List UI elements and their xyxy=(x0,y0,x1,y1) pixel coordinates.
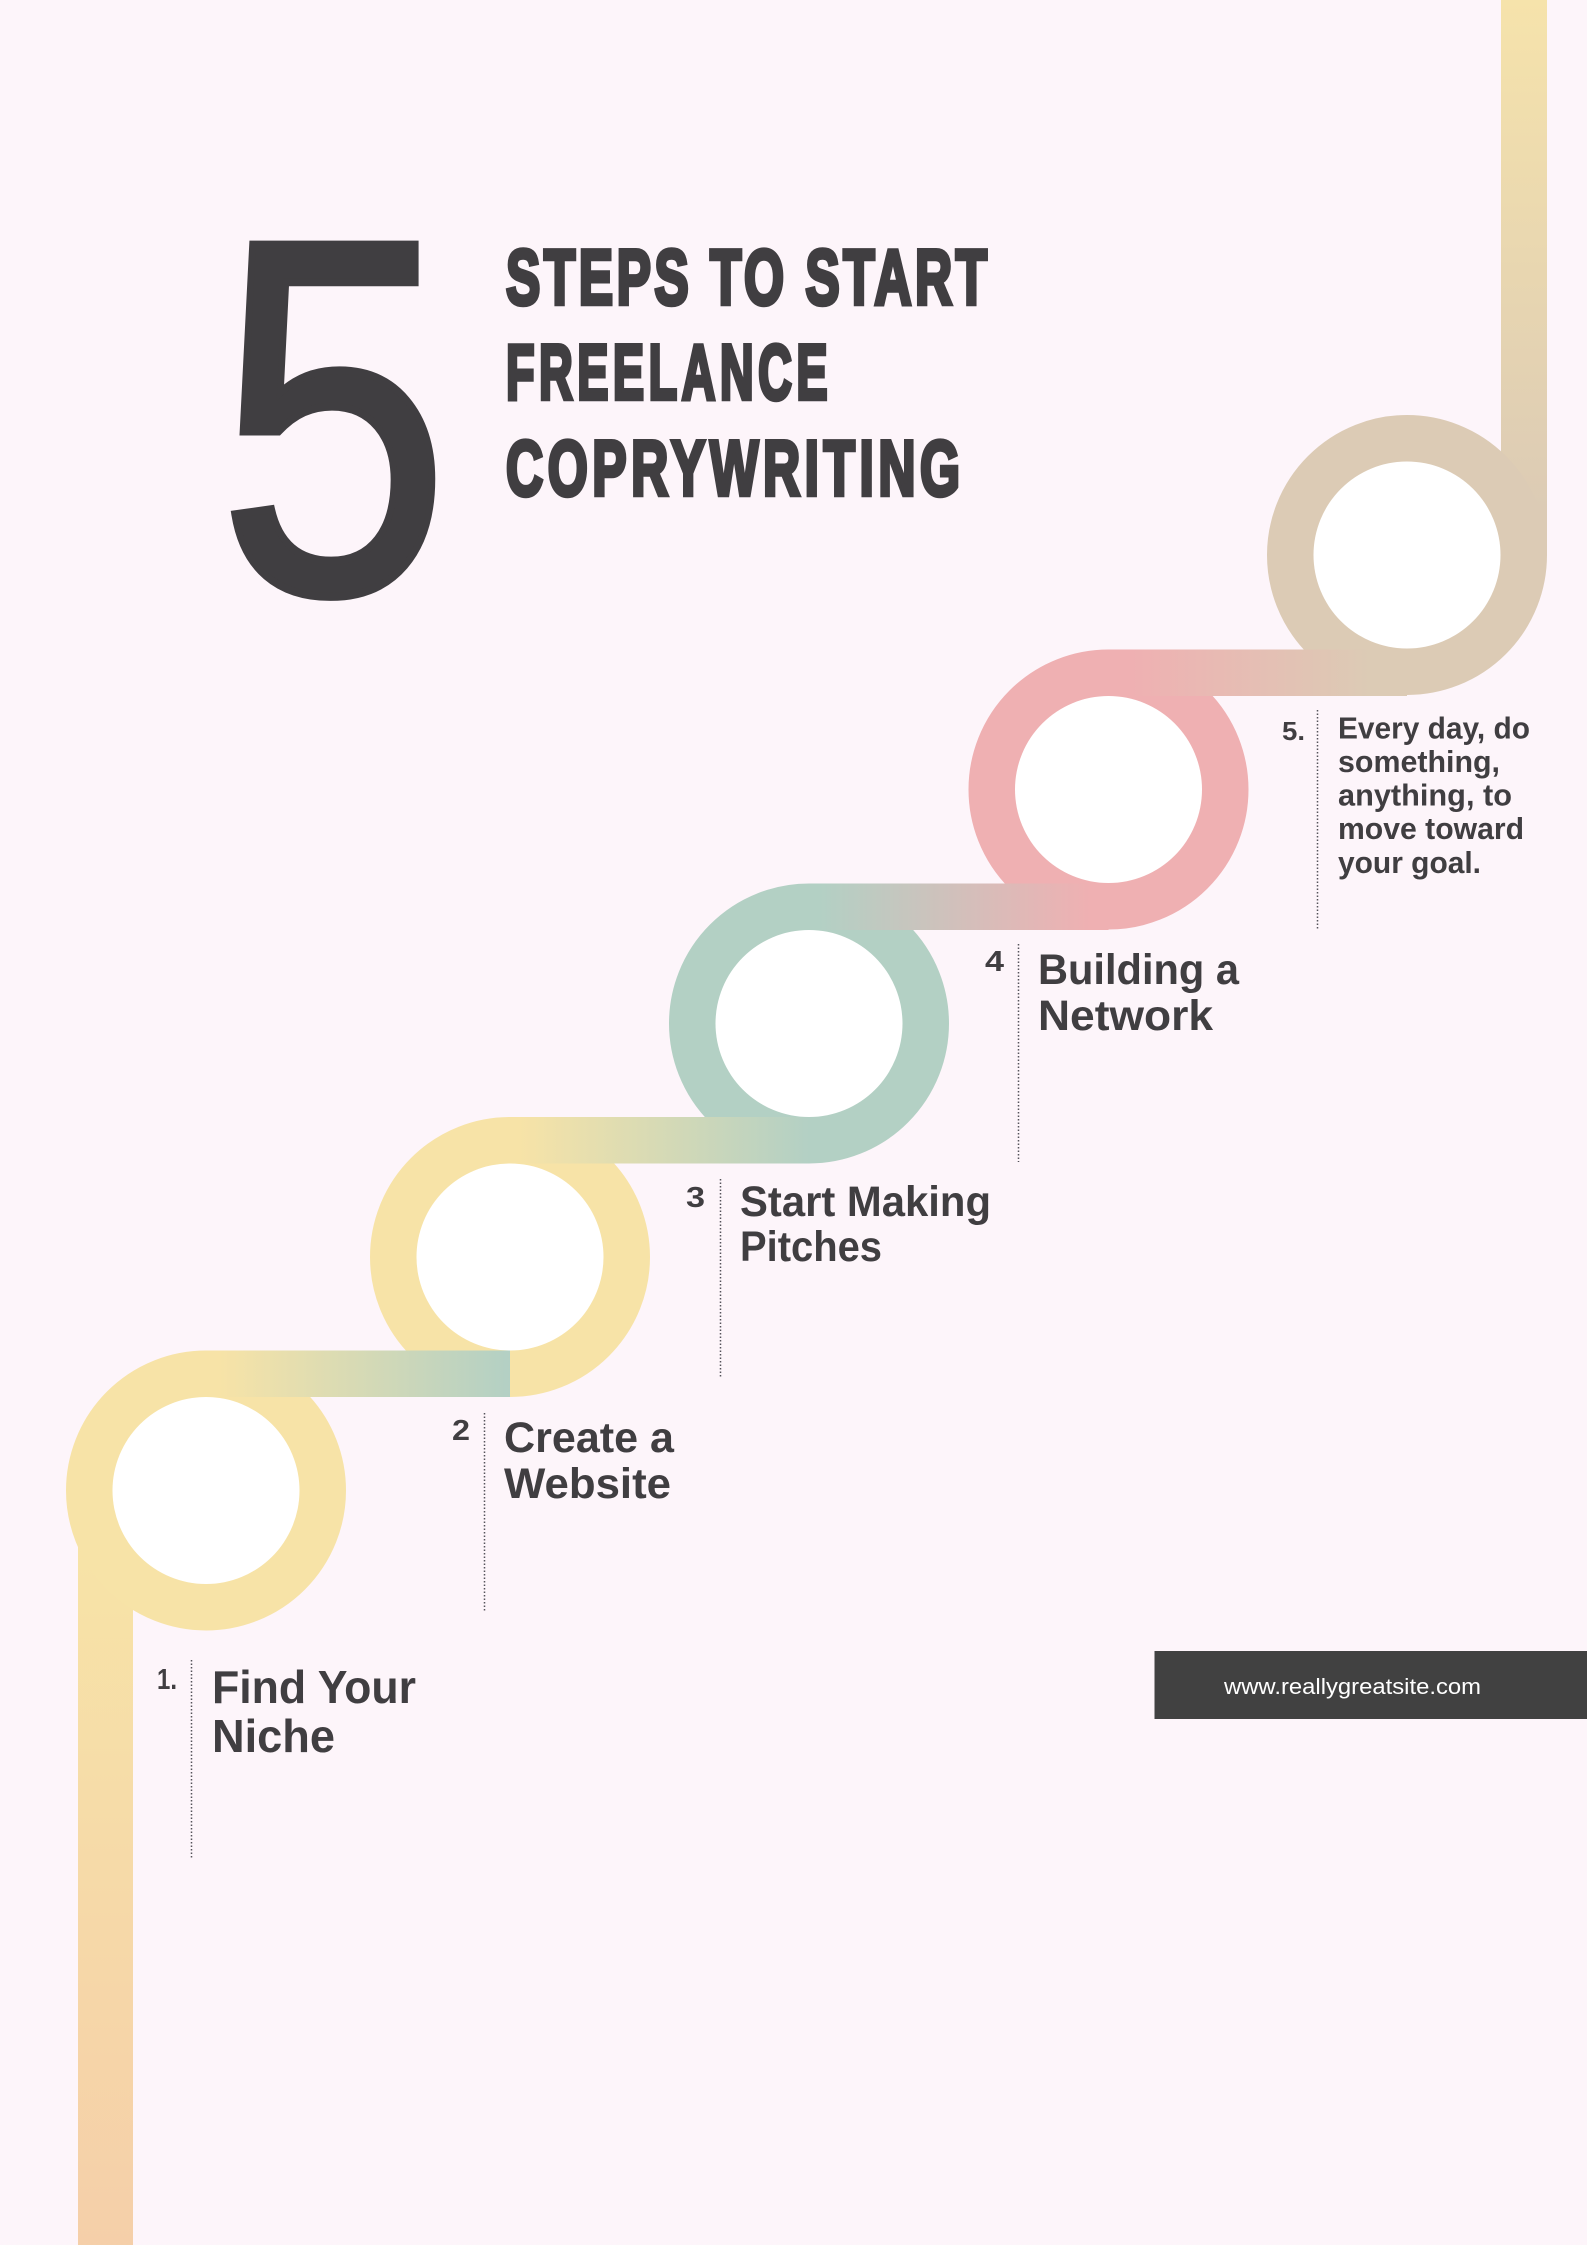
connector 4 to 5 xyxy=(1108,650,1407,696)
step 4: 4 xyxy=(985,946,1004,978)
step 1 xyxy=(157,1660,416,1859)
title xyxy=(506,234,987,513)
connector 3 to 4 xyxy=(809,884,1108,930)
step 1: 1. xyxy=(157,1664,177,1696)
ring 2 centre xyxy=(416,1164,604,1350)
title: STEPS TO START xyxy=(506,234,987,322)
step 4: Network xyxy=(1038,992,1213,1040)
step 5: something, xyxy=(1338,744,1500,779)
ring 2 xyxy=(394,1140,626,1374)
ring 1 centre xyxy=(112,1397,300,1584)
step 5: move toward xyxy=(1338,811,1524,846)
ring 5 centre xyxy=(1314,462,1500,648)
step 2: Website xyxy=(504,1460,671,1508)
step 2: 2 xyxy=(452,1415,470,1447)
step 2: Create a xyxy=(504,1414,675,1462)
top vertical line xyxy=(1501,0,1547,556)
ring 4 centre xyxy=(1015,696,1202,883)
step 5: your goal. xyxy=(1338,845,1481,880)
ring 1 xyxy=(90,1374,322,1607)
connector 2 to 3 xyxy=(510,1117,809,1164)
big numeral 5: 5 xyxy=(218,136,449,700)
ring 3 centre xyxy=(716,930,902,1117)
step 5 xyxy=(1282,710,1530,929)
title: FREELANCE xyxy=(506,329,828,416)
ring 5 xyxy=(1290,438,1524,672)
step 3: Pitches xyxy=(740,1223,882,1271)
website bar: www.reallygreatsite.com xyxy=(1223,1674,1481,1699)
connector 1 to 2 xyxy=(206,1350,510,1397)
ring 4 xyxy=(992,673,1225,906)
ring 3 xyxy=(692,907,926,1140)
step 1: Niche xyxy=(212,1710,335,1762)
step 5: Every day, do xyxy=(1338,710,1530,746)
step 4: Building a xyxy=(1038,946,1240,994)
step 3 xyxy=(686,1178,991,1377)
step 2 xyxy=(452,1413,675,1611)
step 4 xyxy=(985,944,1240,1162)
step 5: anything, to xyxy=(1338,778,1512,812)
step 5: 5. xyxy=(1282,716,1305,746)
step 3: 3 xyxy=(686,1182,705,1214)
website bar xyxy=(1154,1651,1587,1719)
title: COPRYWRITING xyxy=(506,425,960,513)
step 1: Find Your xyxy=(212,1661,416,1713)
step 3: Start Making xyxy=(740,1178,991,1226)
bottom vertical line xyxy=(78,1530,133,2245)
